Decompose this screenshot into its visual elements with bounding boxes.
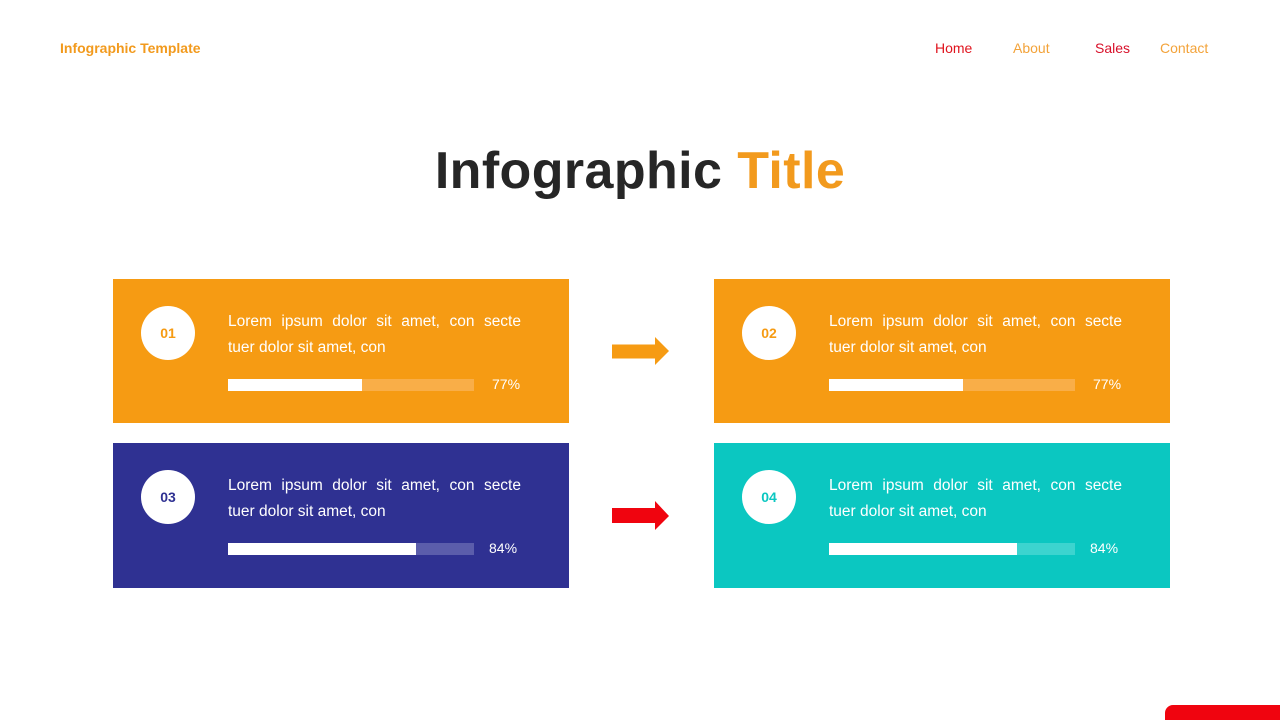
panel: 03 [113,443,569,588]
text 04 [829,477,1122,520]
text 02: ipsum [882,313,924,330]
text 02: sit [977,313,993,330]
panel: 01 [113,279,569,423]
percent 03: 84% [489,540,517,556]
progress 03 [228,543,474,555]
text 04: secte [1085,477,1122,494]
text 03 [228,477,521,520]
progress 04 [829,543,1075,555]
text 02: tuer dolor sit amet, con [829,339,987,356]
text 03: secte [484,477,521,494]
text 01: tuer dolor sit amet, con [228,339,386,356]
nav: Contact: Contact [1160,40,1208,56]
progress 02 [829,379,1075,391]
text 03: con [449,477,474,494]
text 04: con [1050,477,1075,494]
text 04: amet, [1002,477,1041,494]
panel: 04 [714,443,1170,588]
text 02: Lorem [829,313,873,330]
text 03: Lorem [228,477,272,494]
badge 02: 02 [761,325,777,341]
percent 01: 77% [492,376,520,392]
arrow 1 [612,337,669,365]
percent 04: 84% [1090,540,1118,556]
corner tab [1165,705,1280,720]
text 03: dolor [332,477,367,494]
text 04: sit [977,477,993,494]
text 01: ipsum [281,313,323,330]
text 04: Lorem [829,477,873,494]
badge 04 [742,470,796,524]
brand: Infographic Template [60,40,201,56]
nav: Home: Home [935,40,972,56]
text 01: con [449,313,474,330]
text 04: ipsum [882,477,924,494]
nav: About: About [1013,40,1050,56]
text 03: amet, [401,477,440,494]
badge 03: 03 [160,489,176,505]
badge 04: 04 [761,489,777,505]
badge 01 [141,306,195,360]
text 01: secte [484,313,521,330]
badge 02 [742,306,796,360]
text 02: con [1050,313,1075,330]
panel: 02 [714,279,1170,423]
arrow 2 [612,501,669,530]
text 02: dolor [933,313,968,330]
text 01: Lorem [228,313,272,330]
text 02: amet, [1002,313,1041,330]
text 01 [228,313,521,356]
text 04: dolor [933,477,968,494]
text 03: ipsum [281,477,323,494]
text 03: tuer dolor sit amet, con [228,503,386,520]
badge 01: 01 [160,325,176,341]
nav: Sales: Sales [1095,40,1130,56]
text 04: tuer dolor sit amet, con [829,503,987,520]
title: Infographic Title [435,142,845,200]
text 01: amet, [401,313,440,330]
badge 03 [141,470,195,524]
text 02: secte [1085,313,1122,330]
progress 01 [228,379,474,391]
text 03: sit [376,477,392,494]
percent 02: 77% [1093,376,1121,392]
text 02 [829,313,1122,356]
text 01: dolor [332,313,367,330]
text 01: sit [376,313,392,330]
